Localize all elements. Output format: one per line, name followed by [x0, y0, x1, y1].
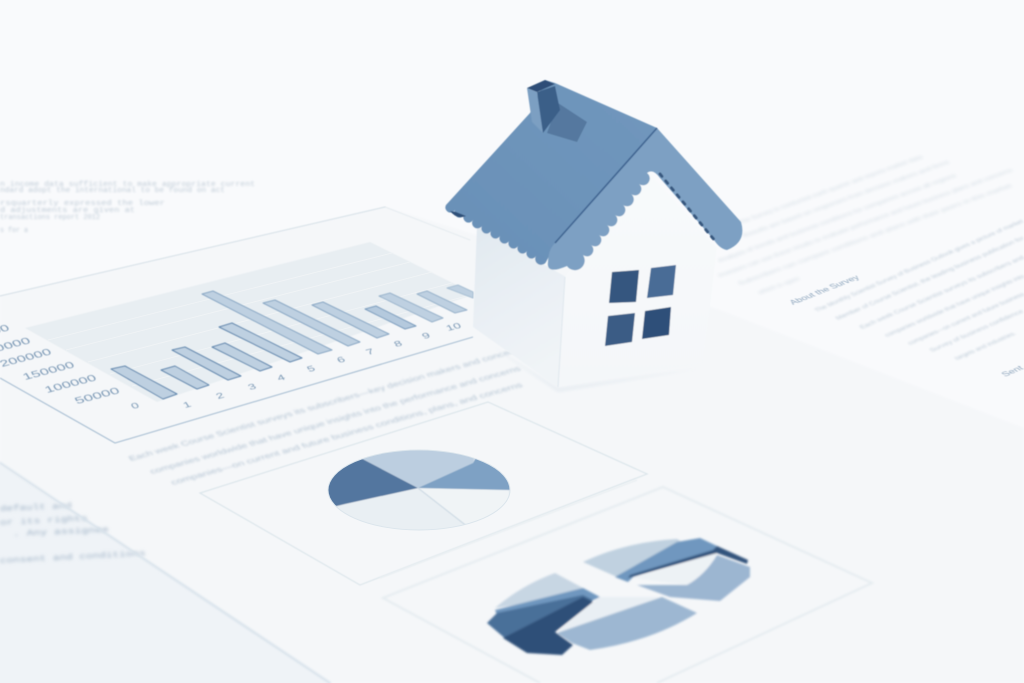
text block: upper-left blurred page text: ndard adopt the international to be found on act	[0, 187, 225, 195]
x axis labels: 5	[305, 364, 317, 374]
second pie frame	[383, 487, 872, 683]
x axis labels: 4	[275, 373, 287, 383]
text block: lower-left page text: or its rights	[0, 514, 88, 528]
x axis labels: 10	[444, 322, 463, 333]
chart frame	[0, 337, 473, 443]
text block: upper-right survey page: The Survey is conducted each quarter and reports market data	[737, 155, 925, 225]
text block: upper-right survey page: Subscribers can compare conditions and plans with their peers in this market	[737, 184, 1014, 286]
text block: paragraph under bar chart: companies—on current and future business conditions, plans, and concerns	[169, 381, 525, 487]
x axis labels: 3	[246, 382, 258, 392]
lower-left exploded slices	[487, 573, 697, 655]
text block: lower-left page text: . Any assignee	[13, 526, 109, 539]
front wall	[558, 170, 717, 387]
text block: upper-right survey page: Results are based on responses from decision makers and firms	[742, 160, 952, 238]
text block: lower-left page text: consent and conditions	[0, 549, 146, 566]
chimney shadow	[547, 103, 587, 142]
x axis labels: 8	[392, 339, 404, 349]
x axis labels: 2	[214, 391, 226, 401]
wall corner edge	[558, 277, 565, 387]
text block: paragraph under bar chart: companies worldwide that have unique insights into the performance and concerns	[148, 365, 523, 476]
text block: survey body	[812, 218, 1024, 361]
gable underside teeth	[660, 174, 716, 242]
sheet: main report page	[0, 207, 1024, 683]
sheet: lower-left paper	[0, 465, 330, 683]
text block: lower-left page text	[0, 502, 146, 566]
y axis labels: 100000	[42, 373, 99, 395]
text block: upper-left blurred page text: rsquarterly expressed the lower	[0, 200, 165, 208]
x axis labels: 9	[420, 331, 432, 341]
pie outline	[328, 450, 510, 530]
grid lines	[48, 253, 474, 386]
left wall	[473, 226, 566, 387]
text block: upper-left blurred page text: transactions report 2012	[0, 214, 100, 222]
text block: lower-left page text: default and	[0, 502, 72, 514]
chimney side	[527, 88, 543, 133]
text block: upper-left blurred page text: s for a	[0, 227, 28, 235]
x axis labels	[129, 322, 463, 411]
text block: upper-left blurred page text: n income data sufficient to make appropriate current	[0, 181, 255, 189]
upper-right exploded slices	[583, 538, 750, 601]
windows	[605, 265, 676, 346]
text block: upper-left blurred page text	[0, 181, 255, 235]
x axis labels: 7	[364, 347, 376, 357]
ridge fold	[555, 128, 657, 243]
icon: paper house	[445, 80, 742, 392]
y axis labels: 50000	[72, 386, 122, 406]
heading: About the Survey: About the Survey	[787, 273, 862, 306]
bars	[111, 285, 473, 399]
house contact shadow	[490, 345, 703, 392]
pie slices	[328, 450, 510, 530]
x axis labels: 6	[335, 355, 347, 365]
sheet edge lines	[0, 207, 470, 683]
roof underside shadow	[450, 211, 466, 217]
gable eave	[548, 128, 742, 270]
chart plot plane	[25, 242, 475, 402]
upper sheet rule	[380, 480, 637, 578]
panel: second exploded pie chart	[380, 480, 872, 683]
text block: paragraph under bar chart: Each week Course Scientist surveys its subscribers—key decision makers and concerns	[127, 345, 526, 463]
chimney top opening	[527, 80, 555, 92]
y axis labels: 150000	[20, 360, 77, 382]
roof main slope	[445, 80, 657, 265]
text block: upper-right survey page: Analysis of trends and business conditions for companies across all regions	[717, 174, 959, 263]
chimney front	[537, 86, 560, 133]
pie frame	[200, 402, 647, 585]
bar chart	[0, 242, 475, 411]
x axis labels: 0	[129, 401, 141, 411]
panel: first pie chart	[200, 402, 647, 585]
x axis labels: 1	[181, 400, 193, 410]
y axis labels	[0, 323, 122, 406]
text block: upper-right survey page: which is open	[756, 277, 802, 295]
text block: upper-left blurred page text: d adjustments are given at	[0, 207, 135, 215]
